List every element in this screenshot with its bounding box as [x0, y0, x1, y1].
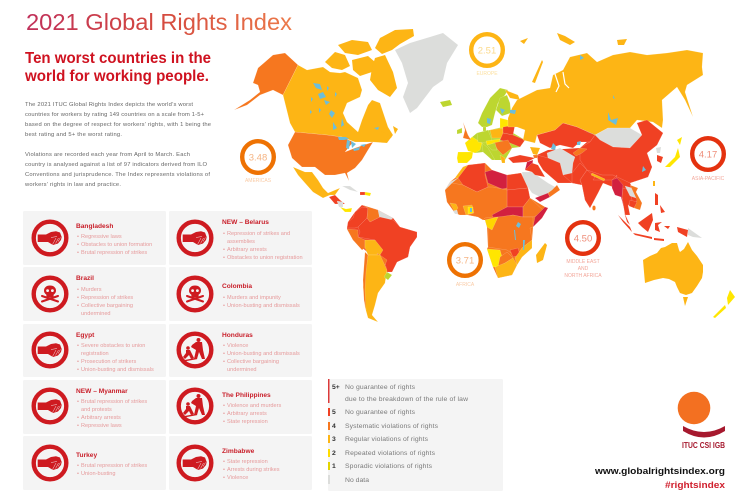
card: Belarus: NEW – Belarus: [222, 219, 269, 226]
card: Honduras: [169, 324, 312, 377]
card: Egypt: Prosecution of strikers: [81, 359, 137, 365]
score ring: Europe: 2.51: [478, 46, 496, 56]
card: Turkey: •: [77, 463, 79, 469]
card: Myanmar: and protests: [81, 407, 112, 413]
legend: Regular violations of rights: [345, 436, 429, 443]
icon: fist: [34, 447, 66, 479]
intro text: Violations are recorded each year from April to March. Each: [25, 152, 190, 158]
score ring: Africa: AFRICA: [456, 282, 475, 288]
card: Brazil: Collective bargaining: [81, 303, 133, 309]
score ring: Americas: AMERICAS: [245, 178, 272, 184]
region: Oceania: [643, 242, 735, 318]
region: North America: [234, 29, 414, 212]
icon: skull: [179, 278, 211, 310]
card: Colombia: •: [223, 303, 225, 309]
card: The Philippines: •: [223, 403, 225, 409]
legend: 4: [332, 423, 336, 430]
region: Middle East: [508, 155, 560, 202]
card: Honduras: Honduras: [222, 332, 253, 339]
score ring: Asia-Pacific: ASIA-PACIFIC: [692, 176, 725, 182]
card: Bangladesh: •: [77, 234, 79, 240]
score ring: Africa: [449, 244, 481, 288]
card: Brazil: undermined: [81, 311, 111, 317]
card: The Philippines: •: [223, 419, 225, 425]
card: Turkey: •: [77, 471, 79, 477]
card: Belarus: •: [223, 255, 225, 261]
legend: 5+: [332, 384, 340, 391]
card: Belarus: Repression of strikes and: [227, 231, 290, 237]
intro text: workers’ rights in law and practice.: [24, 182, 121, 188]
card: Turkey: [23, 436, 166, 490]
card: Zimbabwe: •: [223, 475, 225, 481]
card: Egypt: [23, 324, 166, 377]
card: Brazil: Brazil: [76, 275, 94, 282]
card: Brazil: •: [77, 295, 79, 301]
score ring: Asia-Pacific: 4.17: [699, 150, 717, 160]
card: Myanmar: Repressive laws: [81, 423, 122, 429]
score ring: Middle East and North Africa: AND: [578, 266, 589, 272]
card: Honduras: undermined: [227, 367, 257, 373]
score ring: Europe: [471, 34, 503, 77]
card: Belarus: Obstacles to union registration: [227, 255, 303, 261]
score ring: Americas: 3.48: [249, 152, 267, 164]
card: Egypt: •: [77, 367, 79, 373]
legend: No data: [345, 477, 369, 484]
intro text: country is analysed against a list of 97 indicators derived from ILO: [25, 162, 207, 168]
icon: fist: [179, 222, 211, 254]
card: Myanmar: •: [77, 399, 79, 405]
card: Zimbabwe: Arrests during strikes: [227, 467, 280, 473]
region: Iceland: [440, 100, 452, 107]
legend: 1: [332, 463, 336, 470]
card: Honduras: •: [223, 343, 225, 349]
card: Brazil: Murders: [81, 287, 102, 293]
card: Bangladesh: •: [77, 250, 79, 256]
card: The Philippines: Violence and murders: [227, 403, 282, 409]
score ring: Middle East and North Africa: [564, 222, 602, 279]
card: Brazil: •: [77, 303, 79, 309]
card: Belarus: •: [223, 231, 225, 237]
card: Egypt: Severe obstacles to union: [81, 343, 145, 349]
hashtag: #rightsindex: [665, 480, 726, 491]
card: Colombia: Colombia: [222, 283, 252, 290]
card: Honduras: Collective bargaining: [227, 359, 279, 365]
card: Brazil: [23, 267, 166, 321]
card: Bangladesh: •: [77, 242, 79, 248]
heading: Ten worst countries in the: [25, 50, 211, 67]
card: Zimbabwe: •: [223, 459, 225, 465]
card: Egypt: •: [77, 359, 79, 365]
card: Belarus: assemblies: [227, 239, 255, 245]
card: Turkey: Brutal repression of strikes: [81, 463, 147, 469]
legend: No guarantee of rights: [345, 384, 416, 391]
legend: [328, 379, 503, 491]
card: Bangladesh: Regressive laws: [81, 234, 122, 240]
card: Myanmar: [23, 380, 166, 434]
card: Belarus: [169, 211, 312, 265]
card: Zimbabwe: State repression: [227, 459, 268, 465]
card: Honduras: Union-busting and dismissals: [227, 351, 300, 357]
intro text: [24, 102, 211, 188]
heading: world for working people.: [24, 68, 209, 85]
card: Myanmar: NEW – Myanmar: [76, 388, 128, 395]
legend: Systematic violations of rights: [345, 423, 439, 430]
score ring: Middle East and North Africa: NORTH AFRICA: [564, 273, 602, 279]
score ring: Middle East and North Africa: 4.50: [574, 234, 592, 244]
region: Russia: [508, 33, 703, 155]
region: Africa: [445, 163, 548, 278]
icon: fist: [179, 447, 211, 479]
card: Zimbabwe: Zimbabwe: [222, 448, 255, 455]
icon: violence: [179, 390, 211, 422]
region: Europe: [457, 88, 525, 163]
card: Bangladesh: Obstacles to union formation: [81, 242, 152, 248]
heading: [24, 50, 211, 85]
card: Zimbabwe: Violence: [227, 475, 248, 481]
legend: No guarantee of rights: [345, 409, 416, 416]
intro text: Conventions and jurisprudence. The Index represents violations of: [25, 172, 210, 178]
card: Turkey: Union-busting: [81, 471, 116, 477]
card: Myanmar: Brutal repression of strikes: [81, 399, 147, 405]
legend: 3: [332, 436, 336, 443]
intro text: best rating and 5+ the worst rating.: [25, 132, 122, 138]
score ring: Europe: EUROPE: [476, 71, 498, 77]
card: Egypt: •: [77, 343, 79, 349]
region: South America: [347, 205, 417, 322]
website: www.globalrightsindex.org: [594, 466, 725, 477]
legend: due to the breakdown of the rule of law: [345, 396, 468, 403]
score ring: Africa: 3.71: [456, 256, 474, 266]
icon: fist: [34, 222, 66, 254]
card: The Philippines: Arbitrary arrests: [227, 411, 267, 417]
card: Brazil: Repression of strikes: [81, 295, 133, 301]
icon: fist: [34, 390, 66, 422]
region: lakes of North America: [310, 83, 379, 151]
region: Greenland: [395, 33, 458, 113]
card: Belarus: Arbitrary arrests: [227, 247, 267, 253]
card: Bangladesh: Bangladesh: [76, 223, 113, 230]
card: Egypt: registration: [81, 351, 109, 357]
intro text: The 2021 ITUC Global Rights Index depicts the world’s worst: [25, 102, 193, 108]
region: Asia: [537, 120, 702, 241]
card: Colombia: Union-busting and dismissals: [227, 303, 300, 309]
icon: skull: [34, 278, 66, 310]
score ring: Asia-Pacific: [692, 138, 725, 182]
card: Colombia: [169, 267, 312, 321]
legend: Repeated violations of rights: [345, 450, 436, 457]
icon: violence: [179, 334, 211, 366]
legend: Sporadic violations of rights: [345, 463, 433, 470]
card: Turkey: Turkey: [76, 452, 97, 459]
card: Colombia: Murders and impunity: [227, 295, 281, 301]
score ring: Middle East and North Africa: MIDDLE EAST: [566, 259, 600, 265]
legend: 5: [332, 409, 336, 416]
score ring: Americas: [242, 141, 274, 184]
card: Honduras: •: [223, 351, 225, 357]
logo: ITUC CSI IGB: [678, 392, 725, 450]
legend: 2: [332, 450, 336, 457]
card: Myanmar: •: [77, 415, 79, 421]
card: Brazil: •: [77, 287, 79, 293]
title: 2021 Global Rights Index: [26, 9, 292, 35]
card: The Philippines: State repression: [227, 419, 268, 425]
card: The Philippines: •: [223, 411, 225, 417]
card: Egypt: Egypt: [76, 332, 95, 339]
logo: ITUC CSI IGB: ITUC CSI IGB: [682, 441, 725, 450]
region: inland lakes of Eurasia and Africa: [470, 55, 646, 250]
card: Bangladesh: [23, 211, 166, 265]
card: Colombia: •: [223, 295, 225, 301]
intro text: based on the degree of respect for workers’ rights, with 1 being the: [25, 122, 211, 128]
card: Myanmar: •: [77, 423, 79, 429]
card: Egypt: Union-busting and dismissals: [81, 367, 154, 373]
card: Zimbabwe: •: [223, 467, 225, 473]
card: Bangladesh: Brutal repression of strikes: [81, 250, 147, 256]
icon: fist: [34, 334, 66, 366]
card: Zimbabwe: [169, 436, 312, 490]
intro text: countries for workers by rating 149 countries on a scale from 1-5+: [25, 112, 205, 118]
world map: [234, 29, 735, 322]
card: Myanmar: Arbitrary arrests: [81, 415, 121, 421]
card: Honduras: Violence: [227, 343, 248, 349]
card: The Philippines: The Philippines: [222, 392, 271, 399]
card: Belarus: •: [223, 247, 225, 253]
card: The Philippines: [169, 380, 312, 434]
card: Honduras: •: [223, 359, 225, 365]
